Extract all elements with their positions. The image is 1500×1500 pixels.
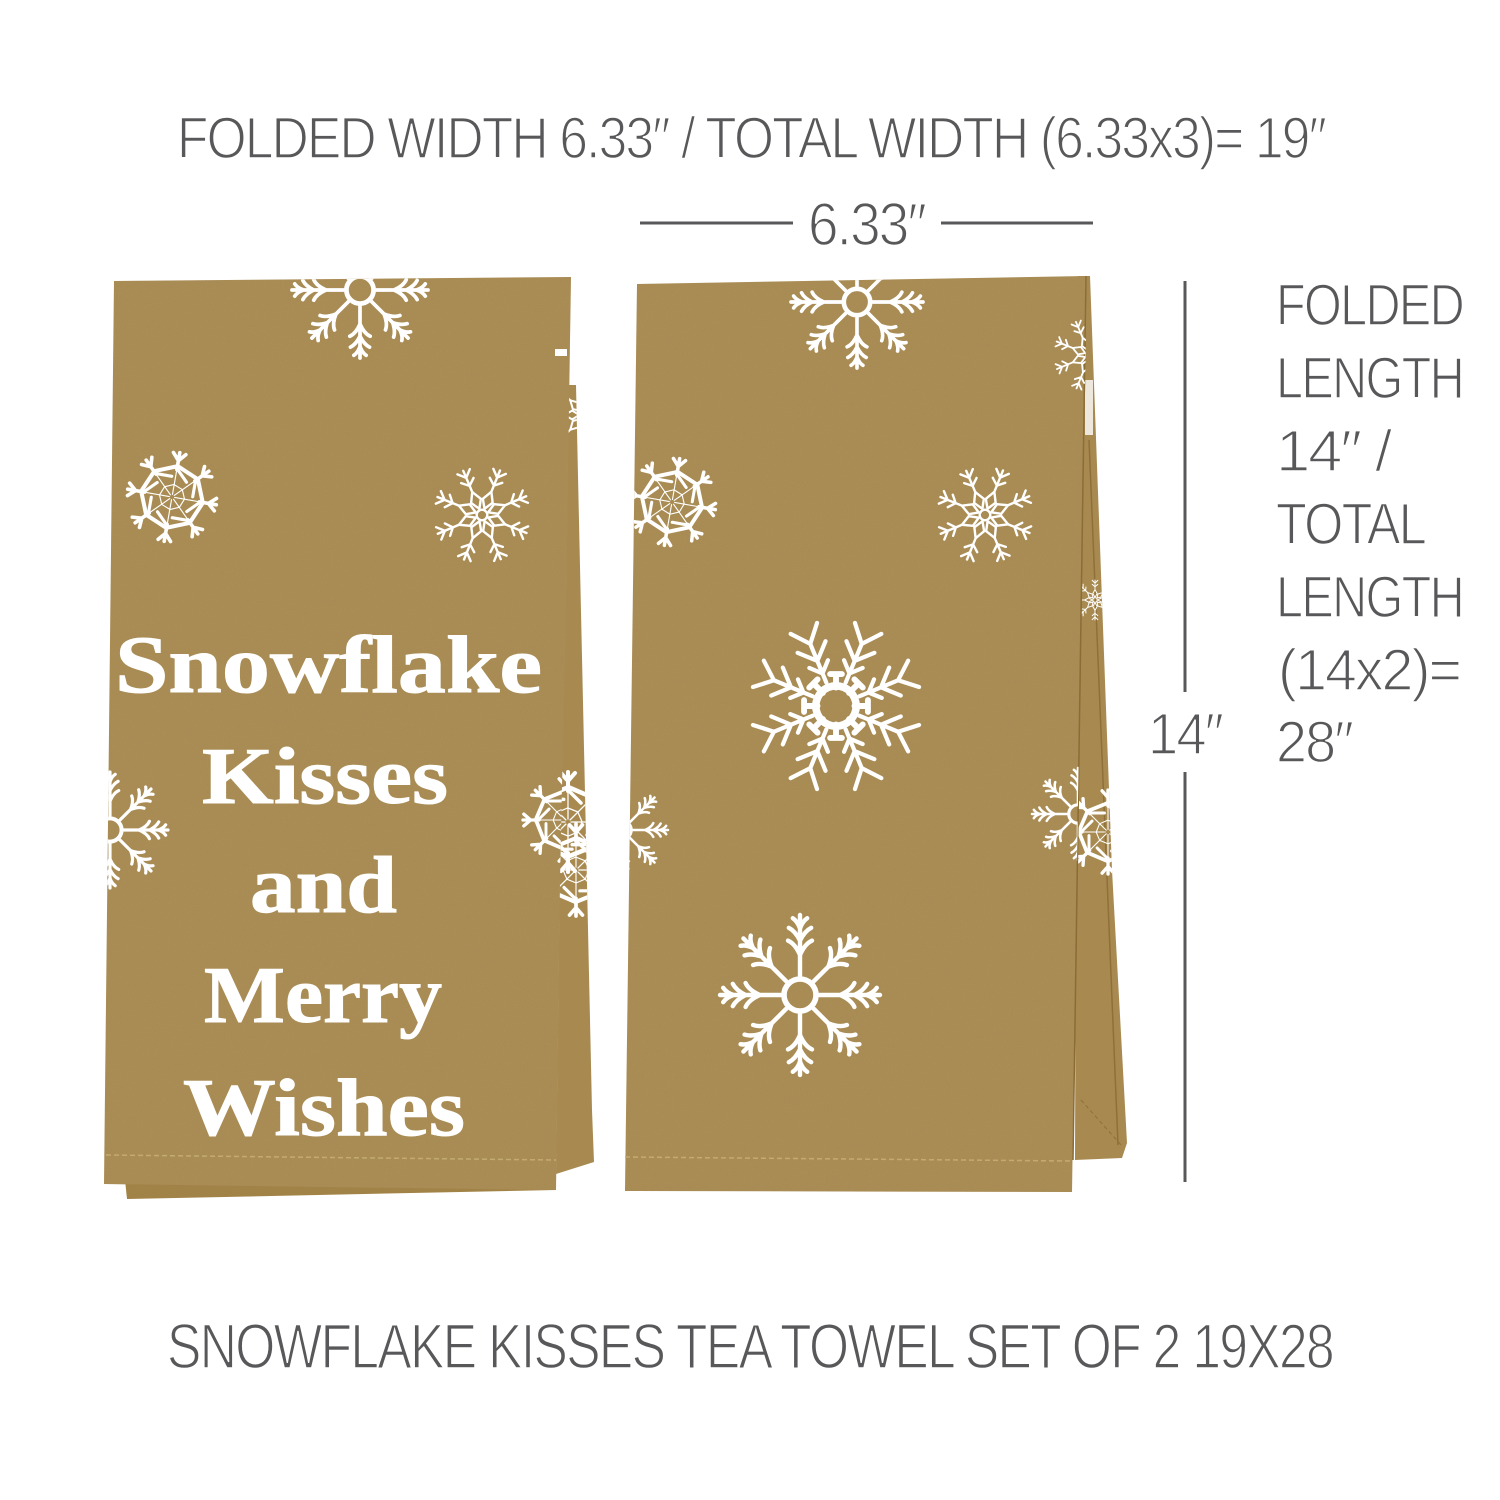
towel message: Snowflake Kisses and Merry Wishes [115,619,542,1153]
side text: folded and total length: 14″ / [1276,419,1393,484]
snowflakes on left towel [52,222,609,888]
towel message: Snowflake Kisses and Merry Wishes: Snowflake [115,619,542,710]
left towel [104,277,594,1199]
side text: folded and total length: TOTAL [1276,492,1426,557]
right towel [625,276,1127,1192]
towel message: Snowflake Kisses and Merry Wishes: Wishes [183,1062,465,1153]
side text: folded and total length [1276,273,1463,775]
heading: folded and total width: FOLDED WIDTH 6.33″ / TOTAL WIDTH (6.33x3)= 19″ [177,106,1326,171]
length dimension marker: 14″ [1148,702,1223,767]
towel message: Snowflake Kisses and Merry Wishes: Kisses [202,733,448,821]
side text: folded and total length: (14x2)= [1278,638,1460,703]
side text: folded and total length: 28″ [1276,710,1353,775]
width dimension marker: 6.33″ [808,191,927,258]
snowflakes on right towel [629,280,1086,1078]
side text: folded and total length: FOLDED [1276,273,1463,338]
towel message: Snowflake Kisses and Merry Wishes: and [250,842,397,930]
side text: folded and total length: LENGTH [1276,346,1463,411]
towel message: Snowflake Kisses and Merry Wishes: Merry [204,952,442,1040]
side text: folded and total length: LENGTH [1276,565,1463,630]
infographic: tea towel dimensions [104,116,1462,1368]
